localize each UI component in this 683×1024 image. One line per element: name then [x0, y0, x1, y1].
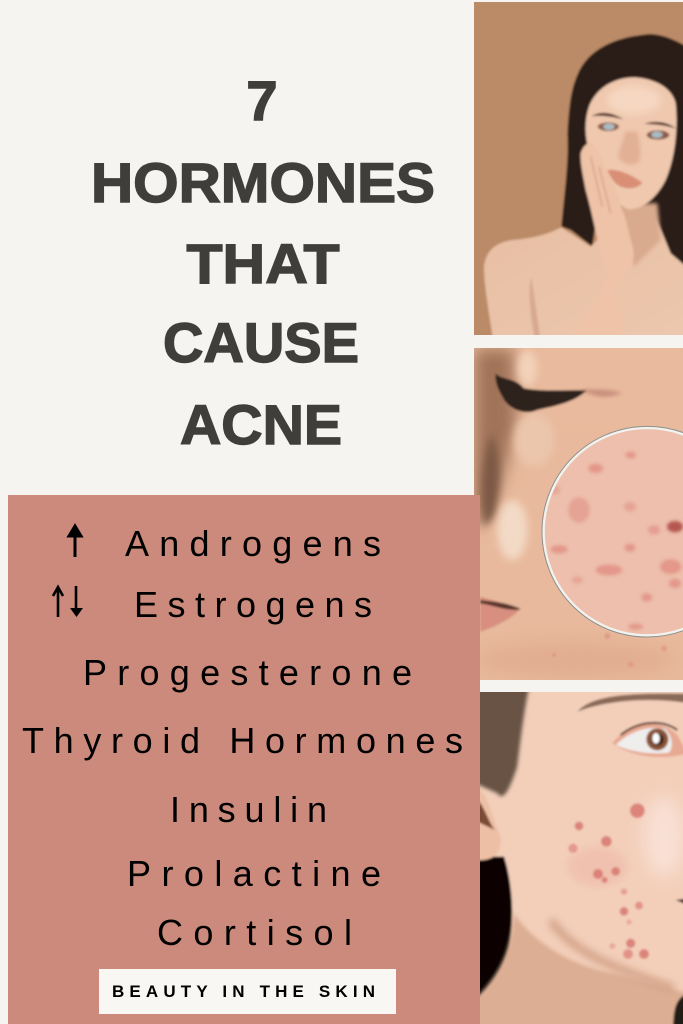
- text panel: [8, 495, 480, 1024]
- brand label: BEAUTY IN THE SKIN: [112, 982, 375, 1001]
- brows: [591, 113, 676, 128]
- shoulders and chest: [482, 222, 683, 335]
- eyebrow: [577, 694, 683, 712]
- brand label: [99, 969, 396, 1014]
- photo: woman touching her cheek: [467, 0, 683, 347]
- acne spots: [568, 803, 649, 959]
- ear: [480, 789, 501, 862]
- cheek highlight: [644, 797, 683, 877]
- eye: [612, 723, 683, 757]
- neck shade: [467, 913, 683, 1024]
- hormone list: Progesterone: [83, 652, 412, 693]
- hormone list: Thyroid Hormones: [22, 720, 463, 761]
- neck: [621, 203, 661, 267]
- black background behind neck: [480, 855, 514, 998]
- hormone list: [22, 523, 463, 953]
- icon: up and down arrows: [53, 586, 83, 617]
- icon: up arrow: [69, 526, 81, 557]
- title: HORMONES: [91, 151, 435, 214]
- lips: [607, 170, 642, 188]
- title: 7: [246, 69, 278, 132]
- hormone list: Insulin: [170, 789, 327, 830]
- dark pimple: [667, 521, 683, 532]
- photo: cheek close-up with magnified acne: [467, 340, 683, 687]
- lower skin shadow: [492, 646, 656, 674]
- eyes: [598, 122, 669, 140]
- lens redness: [548, 452, 681, 630]
- hormone list: Cortisol: [157, 912, 352, 953]
- hormone list: Androgens: [125, 523, 381, 564]
- skin spots: [552, 633, 667, 667]
- photo: woman's face with acne on the cheek: [467, 680, 683, 1024]
- acne redness: [570, 848, 625, 885]
- forehead highlight: [607, 86, 661, 114]
- hair: [561, 34, 683, 277]
- hand: [578, 142, 634, 262]
- nose side shadow: [474, 348, 517, 527]
- hormone list: Estrogens: [134, 584, 372, 625]
- hair: [480, 692, 531, 799]
- finger lines: [591, 157, 611, 213]
- mouth corner: [676, 898, 683, 905]
- magnifier lens: [542, 426, 683, 637]
- title: [91, 69, 435, 456]
- cheek highlight: [497, 500, 527, 560]
- jaw shadow: [551, 920, 674, 988]
- nose: [619, 132, 640, 165]
- arm shadow: [529, 280, 540, 335]
- eyelashes: [495, 373, 587, 412]
- title: THAT: [186, 232, 340, 295]
- hormone list: Prolactine: [127, 853, 381, 894]
- brow bone highlight: [517, 350, 537, 387]
- title: ACNE: [180, 393, 342, 456]
- upper skin: [541, 348, 683, 431]
- face: [586, 77, 676, 209]
- lips: [480, 597, 521, 632]
- title: CAUSE: [163, 311, 359, 374]
